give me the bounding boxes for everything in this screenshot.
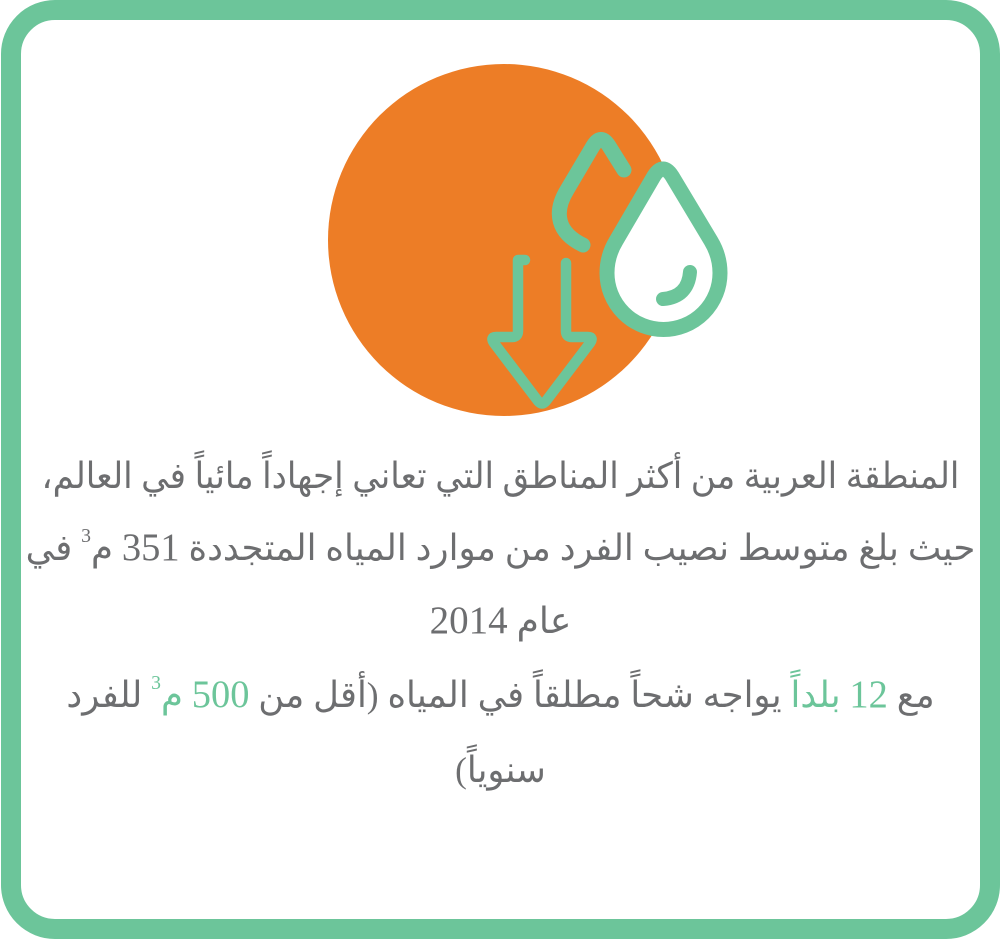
arrow: pointing down bbox=[492, 260, 592, 404]
icon: orange circle with water drop and down arrow bbox=[328, 64, 728, 416]
text block: description bbox=[26, 450, 975, 791]
text line 1: المنطقة العربية من أكثر المناطق التي تعاني إجهاداً مائياً في العالم، bbox=[42, 456, 959, 496]
text line 2: حيث بلغ متوسط نصيب الفرد من موارد المياه المتجددة 351 م3 في bbox=[26, 525, 975, 569]
icon: broken drop outline bbox=[559, 140, 624, 245]
text line 4: مع 12 بلداً يواجه شحاً مطلقاً في المياه (أقل من 500 م3 للفرد bbox=[66, 672, 935, 716]
icon: water drop bbox=[607, 169, 720, 330]
text line 3: عام 2014 bbox=[430, 599, 571, 642]
text line 5: سنوياً) bbox=[455, 750, 546, 790]
orange circle bbox=[328, 64, 680, 416]
